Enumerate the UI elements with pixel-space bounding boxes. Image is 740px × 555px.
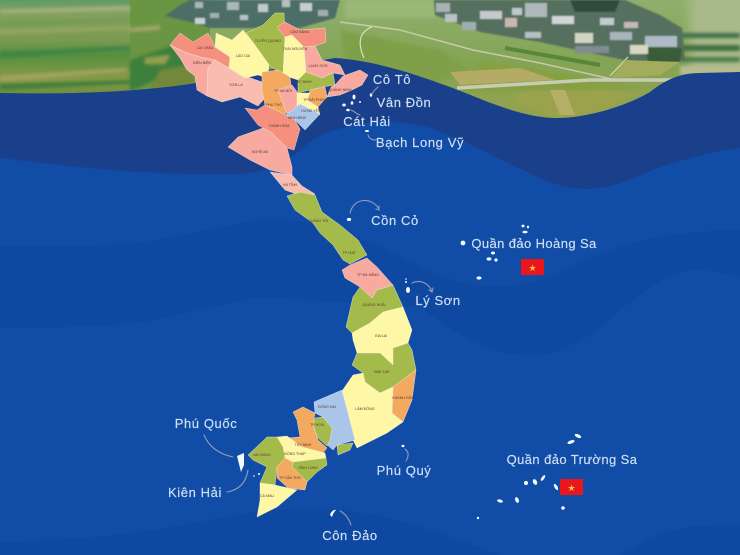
province: Bà Rịa	[337, 443, 353, 455]
province: Lào Cai	[215, 30, 269, 78]
province: Hà Nội	[278, 85, 298, 114]
province: Hải Phòng	[307, 87, 327, 107]
province: Gia Lai	[352, 307, 412, 365]
province: Cao Bằng	[277, 22, 326, 47]
province: Đồng Tháp	[277, 436, 326, 462]
province: Khánh Hòa	[392, 370, 416, 422]
flag: Vietnam at Hoàng Sa	[521, 259, 544, 275]
arrow: Phú Quốc	[204, 435, 233, 457]
province name labels: ĐỒNG NAI	[318, 404, 336, 409]
province name labels: NGHỆ AN	[252, 149, 268, 154]
province name labels: TP HÀ NỘI	[274, 88, 292, 93]
province name labels: TP ĐÀ NẴNG	[357, 272, 379, 277]
province: Tây Ninh	[287, 407, 327, 453]
map of Vietnam provinces	[170, 13, 416, 517]
province name labels: TUYÊN QUANG	[255, 38, 281, 43]
province: Ninh Bình	[286, 104, 320, 130]
province name labels: THÁI NGUYÊN	[283, 46, 308, 51]
island label: Côn Đảo: Côn Đảo	[322, 528, 378, 543]
village right	[434, 0, 685, 65]
province: Lai Châu	[170, 33, 230, 68]
Kiên Hải islets	[253, 473, 260, 477]
province name labels: GIA LAI	[375, 334, 387, 338]
island group label: Quần đảo Hoàng Sa: Quần đảo Hoàng Sa	[471, 236, 597, 251]
village left	[165, 0, 340, 28]
province name labels: LAI CHÂU	[197, 46, 214, 50]
province name labels: ĐỒNG THÁP	[284, 451, 306, 456]
province: Lạng Sơn	[304, 46, 345, 78]
province: Quảng Ngãi	[346, 285, 403, 333]
province name labels: QUẢNG TRỊ	[308, 218, 328, 223]
province: Sơn La	[207, 60, 265, 106]
island label: Vân Đồn: Vân Đồn	[377, 95, 431, 110]
sea: darker band across the middle	[0, 219, 740, 355]
island label: Cồn Cỏ: Cồn Cỏ	[371, 213, 419, 228]
flag: Vietnam at Trường Sa: ★	[567, 484, 576, 494]
province: Đắk Lắk	[352, 343, 416, 393]
Trường Sa islands	[477, 433, 582, 519]
province name labels: THANH HÓA	[268, 123, 290, 128]
province name labels: TP HUẾ	[342, 250, 356, 255]
island: Cồn Cỏ with arrow	[347, 200, 379, 221]
province: Hà Tĩnh	[270, 172, 315, 197]
province: Phú Thọ	[262, 70, 292, 115]
province name labels: TP CẦN THƠ	[279, 476, 301, 480]
province name labels: ĐIỆN BIÊN	[193, 60, 211, 65]
province name labels: TP HCM	[310, 423, 324, 427]
sea: dark bottom left wave	[0, 509, 500, 555]
province: Thái Nguyên	[283, 35, 307, 80]
province name labels: CAO BẰNG	[291, 29, 310, 34]
province: Cà Mau	[257, 483, 297, 517]
province: Thanh Hóa	[245, 105, 300, 150]
province: Bắc Ninh	[298, 72, 335, 93]
province name labels: QUẢNG NGÃI	[363, 302, 385, 307]
province: Lâm Đồng	[342, 373, 403, 448]
province name labels: LÀO CAI	[236, 54, 250, 58]
province: Vĩnh Long	[292, 458, 327, 482]
province name labels: LÂM ĐỒNG	[355, 406, 375, 411]
province name labels: BẮC NINH	[294, 79, 312, 84]
province name labels: HÀ TĨNH	[283, 182, 298, 187]
province: An Giang	[248, 437, 285, 485]
province name labels: HƯNG YÊN	[301, 108, 321, 113]
island label: Phú Quý: Phú Quý	[377, 463, 431, 478]
field roads	[340, 22, 680, 118]
island label: Lý Sơn: Lý Sơn	[415, 293, 461, 308]
island label: Bạch Long Vỹ: Bạch Long Vỹ	[376, 135, 464, 150]
province: Đồng Nai	[314, 390, 355, 450]
flag: Vietnam at Hoàng Sa: ★	[528, 264, 537, 274]
province name labels: VĨNH LONG	[298, 465, 318, 470]
province name labels: ĐẮK LẮK	[374, 369, 390, 374]
island label: Cô Tô: Cô Tô	[373, 72, 411, 87]
island: Phú Quý with arrow	[402, 445, 408, 461]
sea: mid blue wave	[0, 122, 740, 555]
island label: Cát Hải: Cát Hải	[343, 114, 391, 129]
province name labels: NINH BÌNH	[288, 116, 307, 120]
province: Hưng Yên	[297, 93, 320, 115]
province name labels: QUẢNG NINH	[329, 87, 352, 92]
flag: Vietnam at Trường Sa	[560, 479, 583, 495]
province: Tuyên Quang	[246, 13, 285, 75]
province name labels: CÀ MAU	[260, 494, 274, 498]
province: Quảng Trị	[287, 192, 367, 264]
province: Cần Thơ	[277, 458, 307, 490]
province name labels: LẠNG SƠN	[309, 64, 328, 68]
Hoàng Sa islands	[461, 225, 529, 280]
province: TP Đà Nẵng	[342, 258, 393, 298]
island group label: Quần đảo Trường Sa: Quần đảo Trường Sa	[507, 452, 638, 467]
aerial photo of rice fields and village	[0, 0, 740, 125]
province: Điện Biên	[170, 45, 215, 96]
province: Nghệ An	[228, 128, 292, 175]
province name labels: TÂY NINH	[295, 443, 312, 447]
island: Côn Đảo with arrow	[330, 510, 351, 525]
province name labels: PHÚ THỌ	[266, 102, 282, 107]
island label: Kiên Hải: Kiên Hải	[168, 485, 222, 500]
province: TP HCM	[313, 417, 332, 446]
province name labels	[193, 29, 414, 498]
northern islands and arrows	[342, 87, 378, 140]
province name labels: KHÁNH HÒA	[392, 395, 414, 400]
island: Phú Quốc	[237, 453, 244, 472]
province: Quảng Ninh	[327, 70, 368, 97]
sea: dark bottom right corner	[620, 525, 740, 555]
province name labels: TP HẢI PHÒNG	[303, 97, 329, 102]
arrow: Kiên Hải	[227, 470, 248, 492]
province name labels: AN GIANG	[253, 453, 271, 457]
province name labels: SƠN LA	[229, 83, 243, 87]
island: Lý Sơn with arrow	[405, 278, 433, 293]
island label: Phú Quốc: Phú Quốc	[175, 416, 237, 431]
